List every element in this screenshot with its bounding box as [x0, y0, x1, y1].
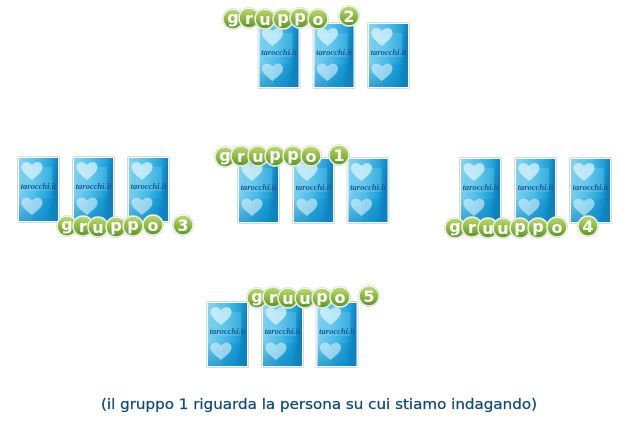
group 3 label: r: [79, 217, 87, 236]
group 3 cards: tarocchi.it: [76, 181, 112, 191]
group 4 label: p: [514, 217, 526, 236]
group 1 label: r: [237, 147, 245, 166]
group 3 cards: tarocchi.it: [131, 181, 167, 191]
group 2 label: u: [259, 10, 271, 29]
group 1 label: p: [269, 145, 281, 164]
group 1 label: p: [287, 145, 299, 164]
group 5 label: u: [282, 289, 294, 308]
group 4 label: o: [552, 218, 562, 237]
group 5 cards: tarocchi.it: [210, 326, 246, 336]
group 2 label: r: [245, 9, 253, 28]
group 4 cards: tarocchi.it: [573, 182, 609, 192]
group 5 label: g: [251, 287, 263, 306]
group 5 cards: [206, 301, 358, 368]
group 1 cards: tarocchi.it: [296, 182, 332, 192]
group 4 label: u: [482, 219, 494, 238]
group 3 cards: tarocchi.it: [21, 181, 57, 191]
group 2 label: g: [227, 8, 239, 27]
group 2 label: p: [294, 7, 306, 26]
group 4 label: r: [468, 218, 476, 237]
group 1 label: u: [252, 147, 264, 166]
group 5 label: p: [316, 287, 328, 306]
group 2 cards: [258, 22, 410, 89]
group 5 cards: tarocchi.it: [319, 326, 355, 336]
group 5 label: u: [299, 289, 311, 308]
group 1 cards: [237, 157, 390, 224]
group 4 cards: [459, 157, 612, 224]
group 4 label: p: [532, 217, 544, 236]
group 2 cards: tarocchi.it: [316, 47, 352, 57]
group 1 label: g: [219, 146, 231, 165]
group 2 label: [222, 6, 360, 30]
caption: (il gruppo 1 riguarda la persona su cui stiamo indagando): [101, 397, 537, 413]
group 5 label: 5: [363, 287, 375, 306]
group 1 cards: tarocchi.it: [241, 182, 277, 192]
group 3 label: p: [110, 216, 122, 235]
group 3 label: p: [127, 215, 139, 234]
group 4 label: [444, 216, 598, 238]
group 2 label: 2: [343, 7, 355, 26]
group 3 label: 3: [177, 216, 189, 235]
group 4 label: 4: [582, 217, 594, 236]
group 4 cards: tarocchi.it: [518, 182, 554, 192]
group 1 label: 1: [333, 146, 345, 165]
group 5 label: [246, 286, 380, 308]
group 1 label: [214, 144, 350, 168]
group 3 label: [56, 214, 194, 238]
group 2 cards: tarocchi.it: [371, 47, 407, 57]
group 1 cards: tarocchi.it: [350, 182, 386, 192]
group 3 label: u: [92, 218, 104, 237]
group 4 cards: tarocchi.it: [463, 182, 499, 192]
group 2 label: o: [312, 10, 324, 29]
group 3 label: o: [148, 216, 158, 235]
group 5 cards: tarocchi.it: [265, 326, 301, 336]
group 1 label: o: [306, 147, 316, 166]
group 5 label: o: [334, 288, 346, 307]
group 4 label: g: [449, 217, 461, 236]
group 2 label: p: [277, 8, 289, 27]
group 4 label: u: [497, 219, 509, 238]
group 3 label: g: [61, 215, 73, 234]
group 2 cards: tarocchi.it: [261, 47, 297, 57]
group 5 label: r: [269, 288, 277, 307]
group 3 cards: [17, 156, 170, 223]
